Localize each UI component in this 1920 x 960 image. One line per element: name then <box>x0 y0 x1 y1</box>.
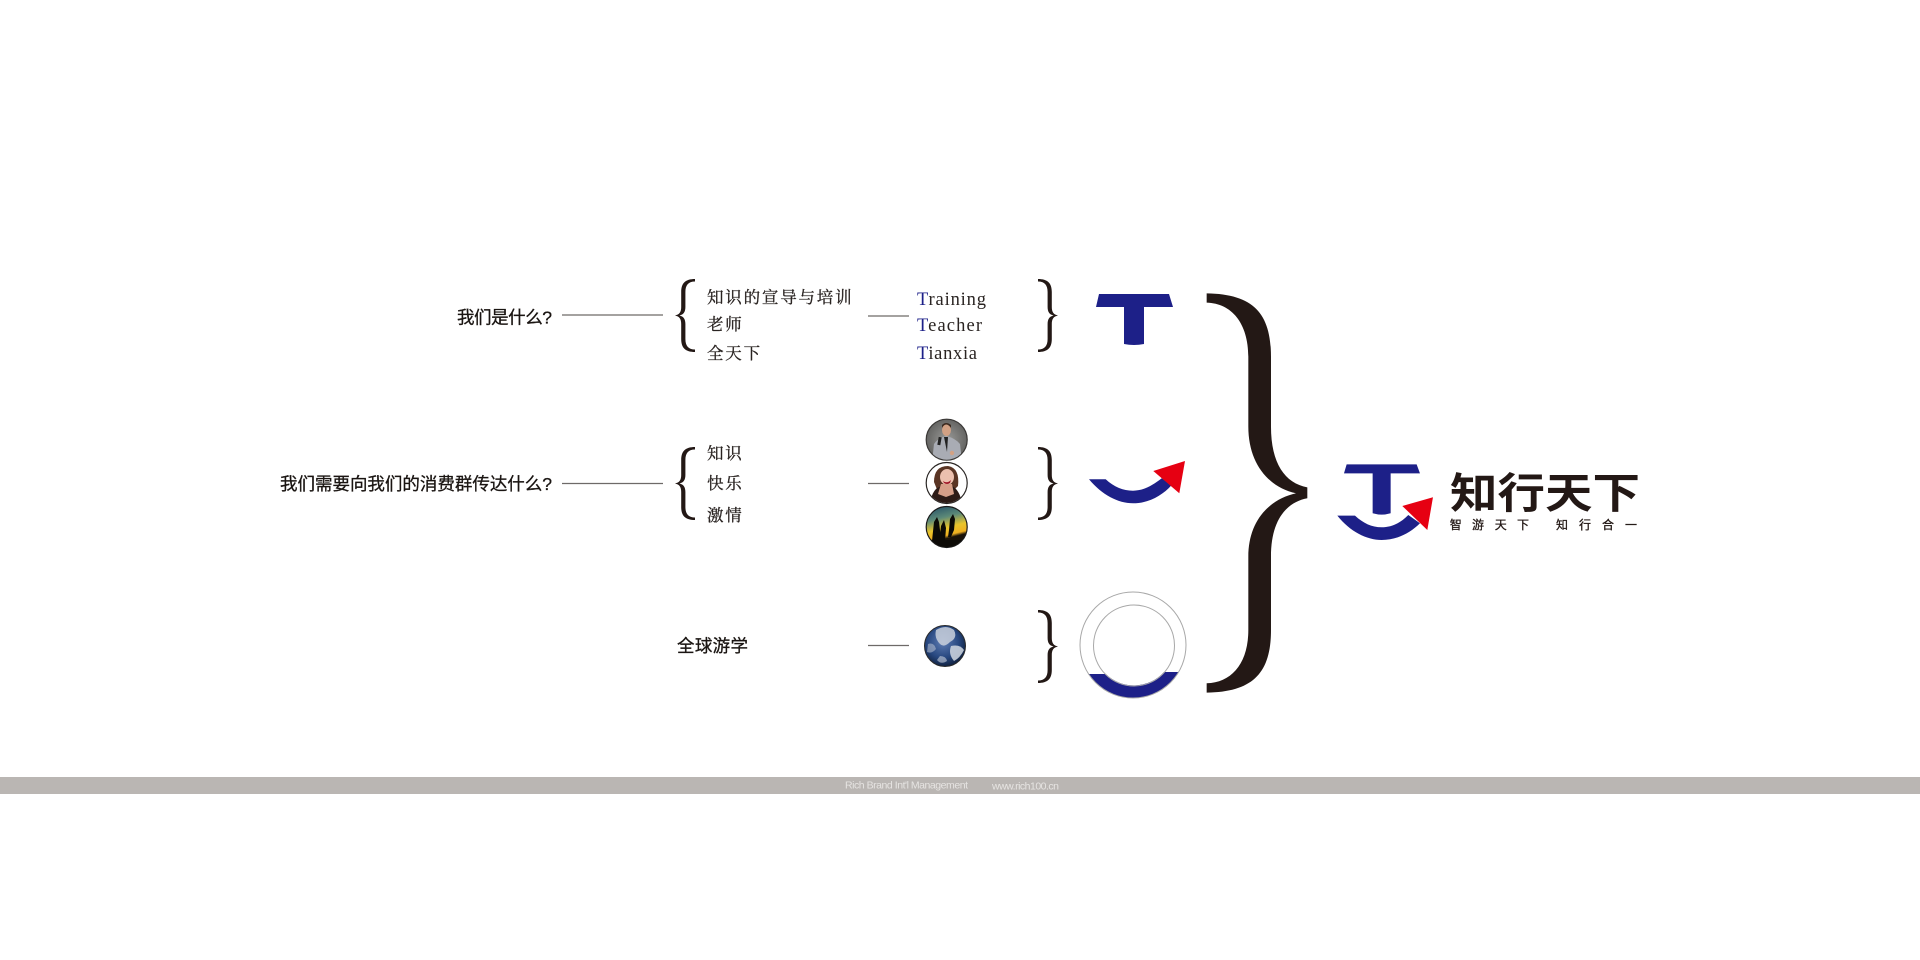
row 1 right brace <box>1038 279 1058 352</box>
logo tagline: 智游天下知行合一 <box>1450 517 1637 532</box>
row 1 chinese items <box>707 288 853 363</box>
row 1 english items <box>917 290 986 364</box>
large right brace <box>1207 293 1307 693</box>
row 1 question: 我们是什么? <box>457 308 552 328</box>
row 1 chinese items: 老师 <box>707 315 744 334</box>
row 1 english items: Tianxia <box>917 344 977 364</box>
icon: blue T <box>1096 294 1173 345</box>
footer bar <box>0 777 1920 794</box>
icon: ring with blue base <box>1080 592 1186 698</box>
photo: speaker man <box>926 419 967 462</box>
row 2 chinese items: 激情 <box>707 506 744 525</box>
row 1 chinese items: 全天下 <box>707 344 762 363</box>
row 3 right brace <box>1038 610 1058 683</box>
icon: blue arc with red arrow <box>1089 461 1185 503</box>
row 1 english items: Teacher <box>917 316 982 336</box>
photo: earth globe <box>924 626 966 666</box>
row 3 connector <box>868 644 909 646</box>
row 3 label: 全球游学 <box>677 636 748 656</box>
row 1 left brace <box>675 279 695 352</box>
row 2 left brace <box>675 447 695 520</box>
row 1 english items: Training <box>917 290 986 310</box>
row 2 chinese items: 知识 <box>707 444 744 463</box>
row 2 chinese items <box>707 444 744 525</box>
brand logo <box>1337 464 1640 540</box>
row 1 second connector <box>868 315 909 317</box>
row 2 second connector <box>868 482 909 484</box>
row 2 right brace <box>1038 447 1058 520</box>
row 2 chinese items: 快乐 <box>707 474 744 493</box>
photo: jumping silhouettes at sunset <box>925 506 969 550</box>
photo: smiling woman <box>926 462 967 504</box>
logo wordmark: 知行天下 <box>1450 470 1640 517</box>
row 1 connector line <box>562 314 663 316</box>
row 1 chinese items: 知识的宣导与培训 <box>707 288 853 307</box>
logo mark: T, arc and arrow <box>1337 464 1433 540</box>
footer bar: Rich Brand Int'l Management <box>845 780 968 792</box>
row 2 question: 我们需要向我们的消费群传达什么? <box>280 474 552 494</box>
footer bar: www.rich100.cn <box>991 780 1059 792</box>
row 2 connector line <box>562 482 663 484</box>
